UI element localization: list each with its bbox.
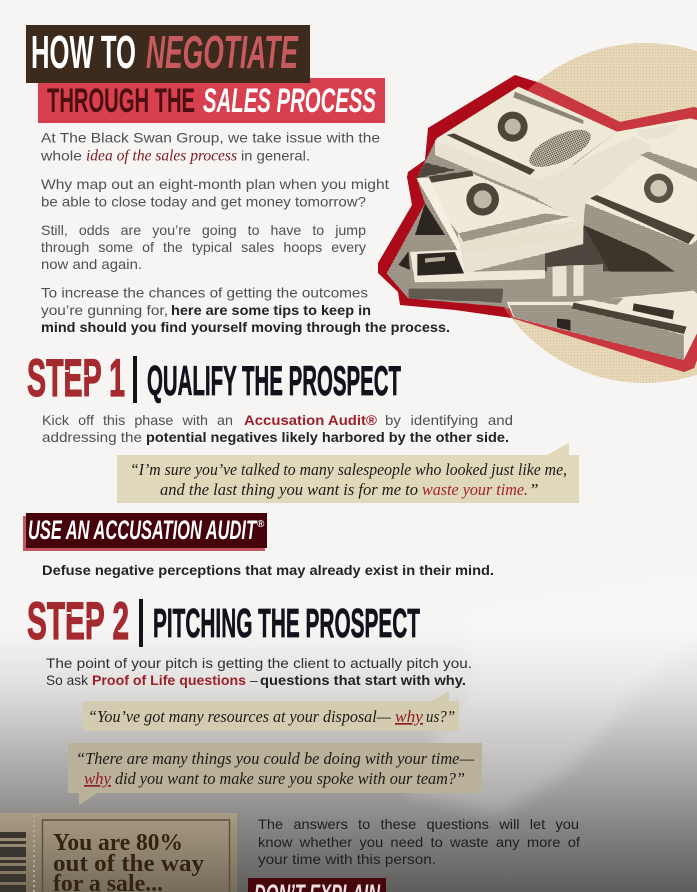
title bar: through the sales process <box>38 78 385 123</box>
red sticker outline <box>378 75 697 372</box>
step 1 text: Accusation Audit® <box>244 412 378 428</box>
left dark bundle <box>417 163 455 178</box>
banknote bundles <box>387 87 697 360</box>
quote bubble: waste your time: ” <box>529 480 538 499</box>
title <box>26 25 385 123</box>
step 1 heading <box>27 349 401 408</box>
intro text: Still, odds are you’re going to have to jump <box>41 222 366 238</box>
background: bottom grey fade <box>0 630 697 892</box>
step 1 text: Kick off this phase with an <box>42 412 233 428</box>
closing text: know whether you need to waste any more of <box>258 834 580 850</box>
quote bubble: waste your time: and the last thing you want is for me to <box>160 480 418 499</box>
step 2 heading <box>27 592 420 651</box>
quote bubble: why us: us?” <box>426 707 455 726</box>
badge: use an accusation audit: USE AN ACCUSATION AUDIT <box>28 515 258 545</box>
intro text: idea of the sales process <box>86 148 237 164</box>
quote bubble: spoke with our team: did you want to make sure you spoke with our team?” <box>115 769 465 788</box>
intro text: through some of the typical sales hoops every <box>41 239 366 255</box>
intro text: whole <box>40 148 82 164</box>
step 2 text: – <box>250 672 258 688</box>
barcode <box>0 832 26 892</box>
step 2 text: So ask <box>46 672 89 688</box>
step 2 text: Proof of Life questions <box>92 672 246 688</box>
step 2 heading: STEP 2 <box>27 592 129 651</box>
tan halftone circle <box>475 43 697 383</box>
lower right bundle <box>507 291 697 360</box>
intro text <box>40 130 450 335</box>
intro text: Why map out an eight-month plan when you might <box>41 176 389 192</box>
middle banknote <box>417 173 583 233</box>
closing text <box>258 816 580 867</box>
title bar: how to negotiate: HOW TO <box>31 26 136 78</box>
quote bubble: why us: “You’ve got many resources at your disposal— <box>88 707 392 726</box>
step 1 text: by identifying and <box>385 412 513 428</box>
closing text: The answers to these questions will let you <box>258 816 579 832</box>
intro text: here are some tips to keep in <box>171 302 371 318</box>
quote bubble: why us: why <box>395 707 423 726</box>
intro text: mind should you find yourself moving through the process. <box>41 319 450 335</box>
badge: don't explain <box>248 878 386 892</box>
ticket: you are 80% out of the way for a sale: out of the way <box>53 851 204 877</box>
title bar: how to negotiate: NEGOTIATE <box>146 26 299 78</box>
quote bubble: spoke with our team: why <box>84 769 111 788</box>
defuse line: Defuse negative perceptions that may already exist in their mind. <box>42 562 494 578</box>
step 1 text: potential negatives likely harbored by the other side. <box>146 429 509 445</box>
badge: use an accusation audit: ® <box>257 519 265 530</box>
background: faint cloth shape <box>400 575 697 815</box>
quote bubble: why us <box>83 691 459 731</box>
intro text: be able to close today and get money tomorrow? <box>41 194 366 210</box>
step 2 heading: PITCHING THE PROSPECT <box>153 600 420 646</box>
ticket: you are 80% out of the way for a sale <box>0 813 237 892</box>
title bar: through the sales process: SALES PROCESS <box>203 82 376 120</box>
quote bubble: waste your time <box>117 443 579 503</box>
intro text: At The Black Swan Group, we take issue with the <box>41 130 380 146</box>
intro text: To increase the chances of getting the outcomes <box>41 284 368 300</box>
quote bubble: spoke with our team <box>68 743 482 805</box>
title bar: how to negotiate <box>26 25 310 83</box>
image: stacks of money <box>378 75 697 372</box>
base fill <box>387 87 697 360</box>
ticket: you are 80% out of the way for a sale: You are 80% <box>53 830 183 856</box>
title bar: through the sales process: THROUGH THE <box>47 82 195 120</box>
intro text: now and again. <box>41 256 142 272</box>
step 2 text <box>46 655 472 688</box>
step 1 text: addressing the <box>42 429 142 445</box>
step 2 text: questions that start with why. <box>260 672 466 688</box>
top bundle <box>435 87 617 201</box>
right bundle <box>545 118 697 245</box>
step 1 heading: STEP 1 <box>27 349 125 408</box>
middle mottled area <box>545 227 674 272</box>
quote bubble: spoke with our team: “There are many things you could be doing with your time— <box>76 749 475 768</box>
text: QUALIFY THE PROSPECT <box>147 357 401 404</box>
step 1 text <box>42 412 513 445</box>
badge: use an accusation audit <box>23 513 267 551</box>
intro text: you’re gunning for, <box>41 302 168 318</box>
intro text: in general. <box>241 148 310 164</box>
step 2 text: The point of your pitch is getting the client to actually pitch you. <box>46 655 472 671</box>
closing text: your time with this person. <box>258 851 436 867</box>
quote bubble: waste your time: “I’m sure you’ve talked to many salespeople who looked just like me, <box>130 460 567 479</box>
quote bubble: waste your time: waste your time. <box>422 480 528 499</box>
